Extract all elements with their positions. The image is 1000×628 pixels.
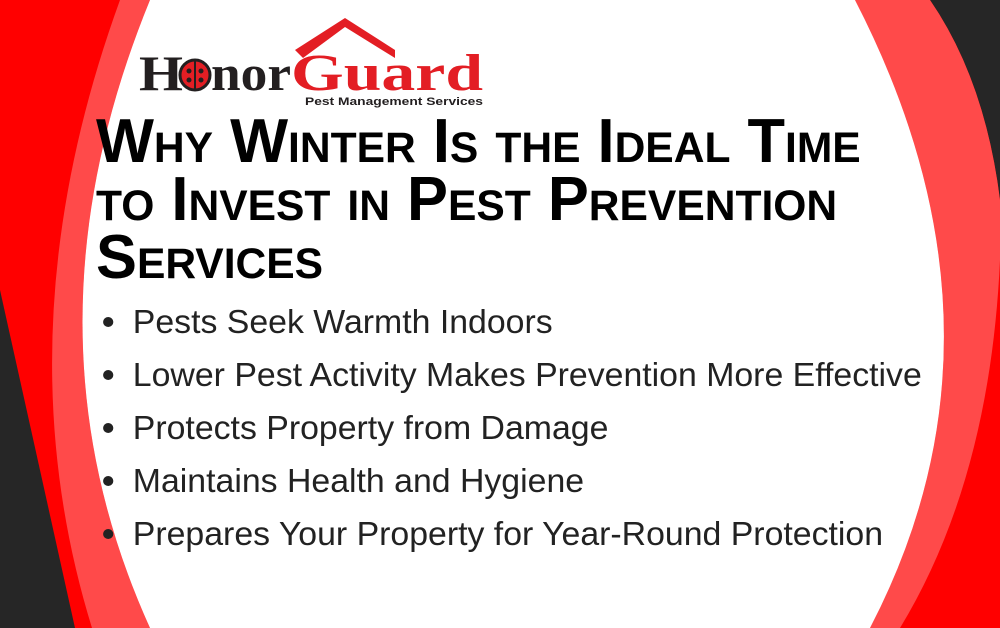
bullet 3: Protects Property from Damage [133, 408, 608, 446]
logo wordmark: H [139, 45, 183, 101]
bullet list [103, 302, 922, 552]
bullet 2: Lower Pest Activity Makes Prevention More Effective [133, 356, 922, 392]
title: Services [96, 223, 323, 292]
title: to Invest in Pest Prevention [96, 165, 837, 234]
logo wordmark: nor [211, 45, 291, 101]
title [96, 107, 861, 292]
logo tagline: Pest Management Services [305, 96, 483, 108]
logo [139, 18, 483, 108]
title: Why Winter Is the Ideal Time [96, 107, 861, 176]
logo wordmark: Guard [291, 45, 483, 102]
bullet 1: Pests Seek Warmth Indoors [133, 302, 553, 340]
logo wordmark [139, 45, 483, 102]
icon: roof [295, 18, 395, 58]
bullet 4: Maintains Health and Hygiene [133, 462, 584, 498]
bullet 5: Prepares Your Property for Year-Round Protection [133, 514, 883, 552]
